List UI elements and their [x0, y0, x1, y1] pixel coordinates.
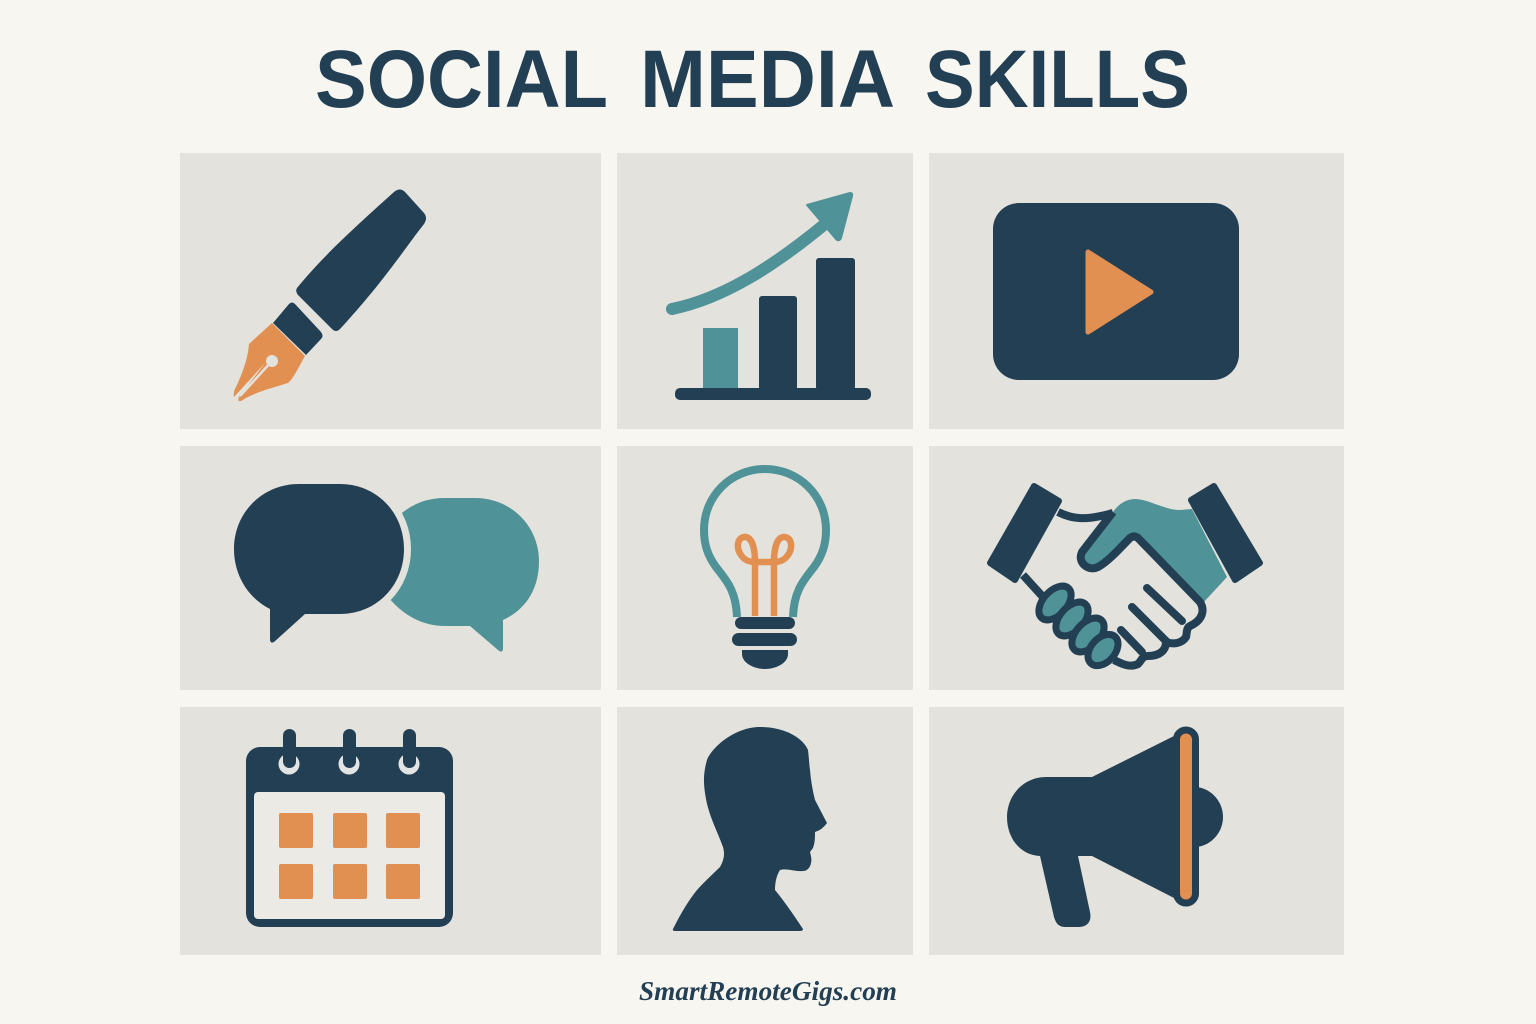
footer: website: SmartRemoteGigs.com [639, 976, 897, 1006]
icon: handshake [990, 486, 1260, 671]
icon: growth bar chart [672, 193, 871, 400]
panel: video [929, 153, 1344, 429]
icon: speech bubbles [234, 484, 539, 652]
panel: marketing [929, 707, 1344, 955]
panel: scheduling [180, 707, 601, 955]
icon: fountain pen [234, 190, 426, 401]
icon: head silhouette [673, 727, 827, 931]
title: MEDIA [640, 34, 895, 125]
panel: creativity [617, 446, 913, 690]
icon: light bulb [704, 469, 826, 669]
panel: communication [180, 446, 601, 690]
panel: analytics [617, 153, 913, 429]
panel: audience [617, 707, 913, 955]
title [315, 34, 1190, 125]
title: SKILLS [925, 34, 1190, 125]
title: SOCIAL [315, 34, 608, 125]
icon: calendar [246, 729, 453, 927]
icon: video player [993, 203, 1239, 380]
panel: partnerships [929, 446, 1344, 690]
panel: content writing [180, 153, 601, 429]
icon: megaphone [1007, 730, 1223, 927]
